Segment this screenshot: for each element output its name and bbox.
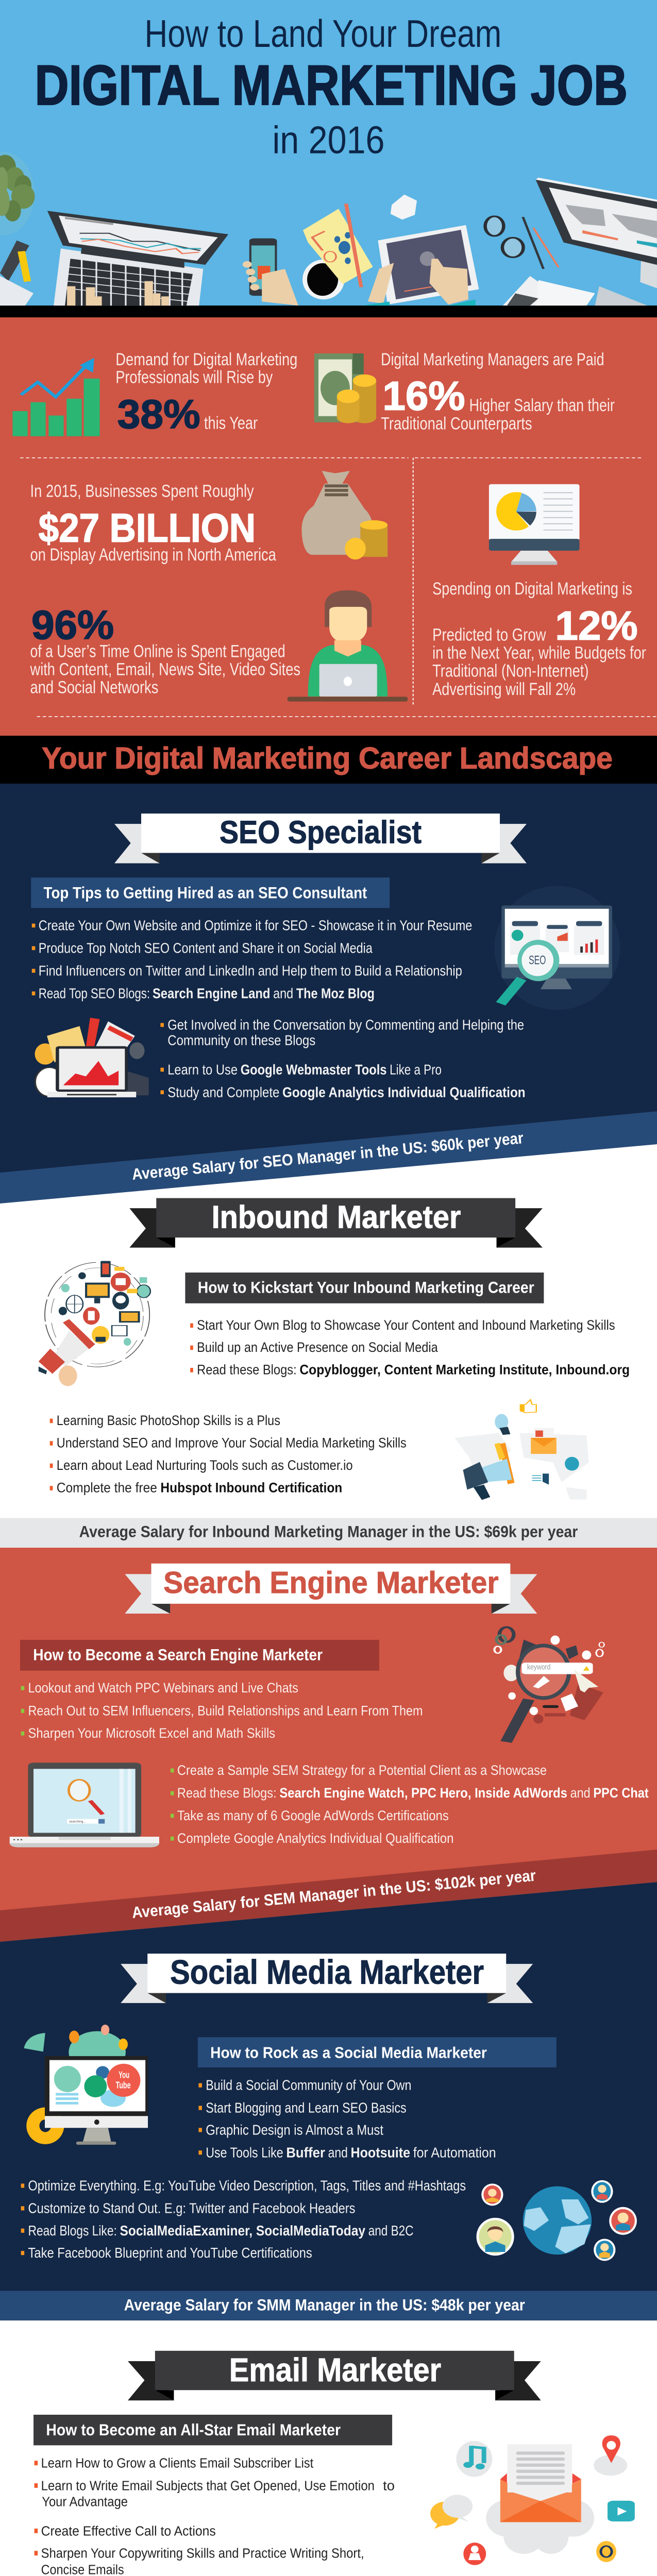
list: SEO community tips: Community on these Blogs xyxy=(167,1032,315,1048)
sub-heading: all-star email marketer: How to Become an All-Star Email Marketer xyxy=(46,2421,341,2439)
icon: magnifier with keyword search xyxy=(494,1627,604,1742)
list: social media optimisation: SocialMediaExaminer, SocialMediaToday xyxy=(120,2223,365,2239)
list: social media tips xyxy=(198,2077,496,2160)
stat: 96% of online time: 96% xyxy=(31,602,114,648)
icon: growth bar chart xyxy=(12,358,100,436)
ribbon heading: SEO Specialist: SEO Specialist xyxy=(220,814,422,850)
icon: laptop with magnifier: searching... xyxy=(69,1820,86,1823)
list: SEO tips: Produce Top Notch SEO Content and Share it on Social Media xyxy=(39,940,373,956)
list: inbound tips: Build up an Active Presence on Social Media xyxy=(197,1340,438,1355)
list: inbound tips: Read these Blogs: xyxy=(197,1362,297,1378)
list: SEM advanced steps: Read these Blogs: xyxy=(177,1785,277,1801)
sub-heading: become a search engine marketer xyxy=(20,1640,379,1671)
list: SEO tips: Search Engine Land xyxy=(153,985,270,1002)
list: social media tips: Use Tools Like xyxy=(206,2145,283,2160)
list: SEM advanced steps: and xyxy=(570,1785,591,1801)
icon: money bag and coins xyxy=(301,471,388,560)
salary band: inbound xyxy=(0,1518,657,1548)
stat: 12% spending growth: Predicted to Grow xyxy=(432,624,546,645)
icon: monitor with pie chart xyxy=(489,484,580,565)
list: SEO tips: and xyxy=(273,985,293,1002)
salary band: social media xyxy=(0,2291,657,2320)
list: inbound tips xyxy=(190,1317,630,1378)
ribbon heading: Email Marketer xyxy=(128,2351,541,2400)
list: SEO community tips: Study and Complete xyxy=(167,1083,279,1100)
icon: plant xyxy=(0,152,35,235)
stat: 38% demand: 38% xyxy=(117,391,200,437)
heading: career landscape band xyxy=(0,736,657,784)
list: email tips: Your Advantage xyxy=(42,2495,128,2510)
list: social media optimisation xyxy=(21,2178,466,2261)
stat: 96% of online time xyxy=(30,602,300,697)
list: SEO community tips: Like a Pro xyxy=(390,1061,442,1078)
stat: 38% demand: this Year xyxy=(204,413,258,433)
list: social media tips: and xyxy=(328,2145,348,2160)
icon: SEO monitor with magnifier: SEO xyxy=(529,953,546,967)
ribbon heading: Email Marketer: Email Marketer xyxy=(229,2352,441,2389)
icon: desktop monitor with world map xyxy=(535,178,657,288)
list: SEO community tips: Learn to Use xyxy=(167,1061,238,1078)
icon: social media monitor xyxy=(24,2025,148,2145)
icon: banknote and coins xyxy=(314,353,376,423)
list: inbound skills: Complete the free xyxy=(57,1480,157,1496)
list: SEO tips: The Moz Blog xyxy=(296,985,375,1002)
sub-heading: rock as social media marketer xyxy=(198,2037,557,2067)
list: social media tips: for Automation xyxy=(413,2145,496,2160)
panel: header xyxy=(0,0,657,317)
list: social media tips: Graphic Design is Almost a Must xyxy=(206,2122,383,2138)
list: social media optimisation: and B2C xyxy=(368,2223,414,2239)
salary band: SEO xyxy=(0,1111,657,1204)
icon: glasses and pens xyxy=(485,216,559,269)
sub-heading: become a search engine marketer: How to Become a Search Engine Marketer xyxy=(33,1646,323,1664)
icon: laptop with charts xyxy=(47,211,228,306)
stat: 16% higher salary: Traditional Counterparts xyxy=(381,414,532,433)
icon: inbound marketing circle with megaphone xyxy=(39,1261,150,1386)
icon: megaphone over world map xyxy=(454,1400,588,1500)
list: social media optimisation: Customize to Stand Out. E.g: Twitter and Facebook Headers xyxy=(28,2200,356,2216)
salary band: SEO: Average Salary for SEO Manager in the US: $60k per year xyxy=(131,1129,524,1183)
icon: laptop with magnifier xyxy=(10,1762,159,1848)
stat: 38% demand: Demand for Digital Marketing xyxy=(115,349,297,369)
list: social media tips: Build a Social Community of Your Own xyxy=(206,2077,411,2093)
list: SEO community tips: Google Webmaster Tools xyxy=(241,1061,386,1078)
icon: social media monitor: You xyxy=(119,2070,129,2080)
list: inbound skills: Hubspot Inbound Certification xyxy=(160,1480,342,1496)
stat: 12% spending growth xyxy=(432,579,646,699)
icon: globe with people avatars xyxy=(476,2180,637,2261)
panel: search engine marketer xyxy=(0,1548,657,1942)
list: email tips: to xyxy=(383,2479,395,2494)
icon: person at laptop xyxy=(288,590,408,702)
icon: SEO monitor with magnifier xyxy=(494,886,620,1010)
stat: 96% of online time: of a User’s Time Online is Spent Engaged xyxy=(30,641,285,661)
list: SEM basics: Sharpen Your Microsoft Excel and Math Skills xyxy=(28,1725,275,1741)
stat: 16% higher salary: 16% xyxy=(382,373,465,419)
ribbon heading: Inbound Marketer xyxy=(129,1198,543,1248)
ribbon heading: Inbound Marketer: Inbound Marketer xyxy=(212,1199,461,1235)
stat: $27 billion display spend: on Display Advertising in North America xyxy=(30,545,276,564)
panel: header: in 2016 xyxy=(273,118,384,161)
list: SEM basics: Lookout and Watch PPC Webinars and Live Chats xyxy=(28,1680,298,1696)
list: SEO community tips xyxy=(160,1016,526,1100)
stat: 38% demand: Professionals will Rise by xyxy=(115,367,273,387)
salary band: SEM: Average Salary for SEM Manager in the US: $102k per year xyxy=(131,1866,536,1922)
stat: 96% of online time: with Content, Email, News Site, Video Sites xyxy=(30,659,300,679)
list: SEM advanced steps xyxy=(171,1762,649,1846)
icon: ruler, pen and tablet xyxy=(0,241,33,306)
panel: social media marketer xyxy=(0,1882,657,2320)
stat: 16% higher salary xyxy=(381,349,615,433)
stat: $27 billion display spend xyxy=(30,481,276,564)
sub-heading: all-star email marketer xyxy=(33,2415,392,2445)
list: SEM basics xyxy=(21,1680,423,1741)
ribbon heading: Social Media Marketer xyxy=(121,1953,533,2003)
list: inbound skills xyxy=(50,1413,407,1496)
list: SEO tips: Read Top SEO Blogs: xyxy=(39,985,150,1002)
list: email tips xyxy=(35,2456,395,2576)
list: inbound skills: Learning Basic PhotoShop Skills is a Plus xyxy=(57,1413,280,1428)
icon: yellow notepad and pencil xyxy=(303,204,373,287)
stat: $27 billion display spend: $27 BILLION xyxy=(39,506,256,551)
stat: 38% demand xyxy=(115,349,297,437)
panel: inbound marketer xyxy=(0,1144,657,1548)
list: email tips: Create Effective Call to Actions xyxy=(41,2524,216,2538)
panel: key statistics xyxy=(0,317,657,736)
stat: 96% of online time: and Social Networks xyxy=(30,677,158,697)
icon: calculator, notebook and keyboard xyxy=(503,276,647,306)
list: social media tips: Hootsuite xyxy=(351,2145,410,2160)
icon: envelope with cloud and icons xyxy=(430,2435,635,2565)
icon: smartphone in hand xyxy=(243,239,298,306)
list: social media tips: Start Blogging and Learn SEO Basics xyxy=(206,2100,407,2116)
sub-heading: top tips xyxy=(31,877,390,908)
panel: email marketer xyxy=(0,2320,657,2576)
list: inbound skills: Learn about Lead Nurturing Tools such as Customer.io xyxy=(57,1458,353,1473)
ribbon heading: SEO Specialist xyxy=(114,814,527,863)
icon: analytics laptop with documents xyxy=(35,1018,149,1097)
list: email tips: Learn How to Grow a Clients Email Subscriber List xyxy=(41,2456,313,2471)
sub-heading: top tips: Top Tips to Getting Hired as an SEO Consultant xyxy=(44,884,367,902)
salary band: SEM xyxy=(0,1850,657,1942)
icon: social media monitor: Tube xyxy=(115,2080,131,2091)
sub-heading: kickstart career xyxy=(185,1273,544,1303)
ribbon heading: Search Engine Marketer xyxy=(125,1564,537,1614)
icon: magnifier with keyword search: keyword xyxy=(527,1663,550,1671)
stat: $27 billion display spend: In 2015, Businesses Spent Roughly xyxy=(30,481,254,501)
list: social media optimisation: Take Facebook Blueprint and YouTube Certifications xyxy=(28,2245,312,2261)
icon: coffee cup xyxy=(302,260,350,299)
icon: tablet with video and hands xyxy=(362,225,479,306)
list: social media tips: Buffer xyxy=(286,2145,325,2160)
panel: SEO specialist xyxy=(0,784,657,1204)
icon: crumpled paper xyxy=(391,195,417,219)
list: social media optimisation: Read Blogs Like: xyxy=(28,2223,117,2239)
list: SEO tips xyxy=(32,917,472,1002)
